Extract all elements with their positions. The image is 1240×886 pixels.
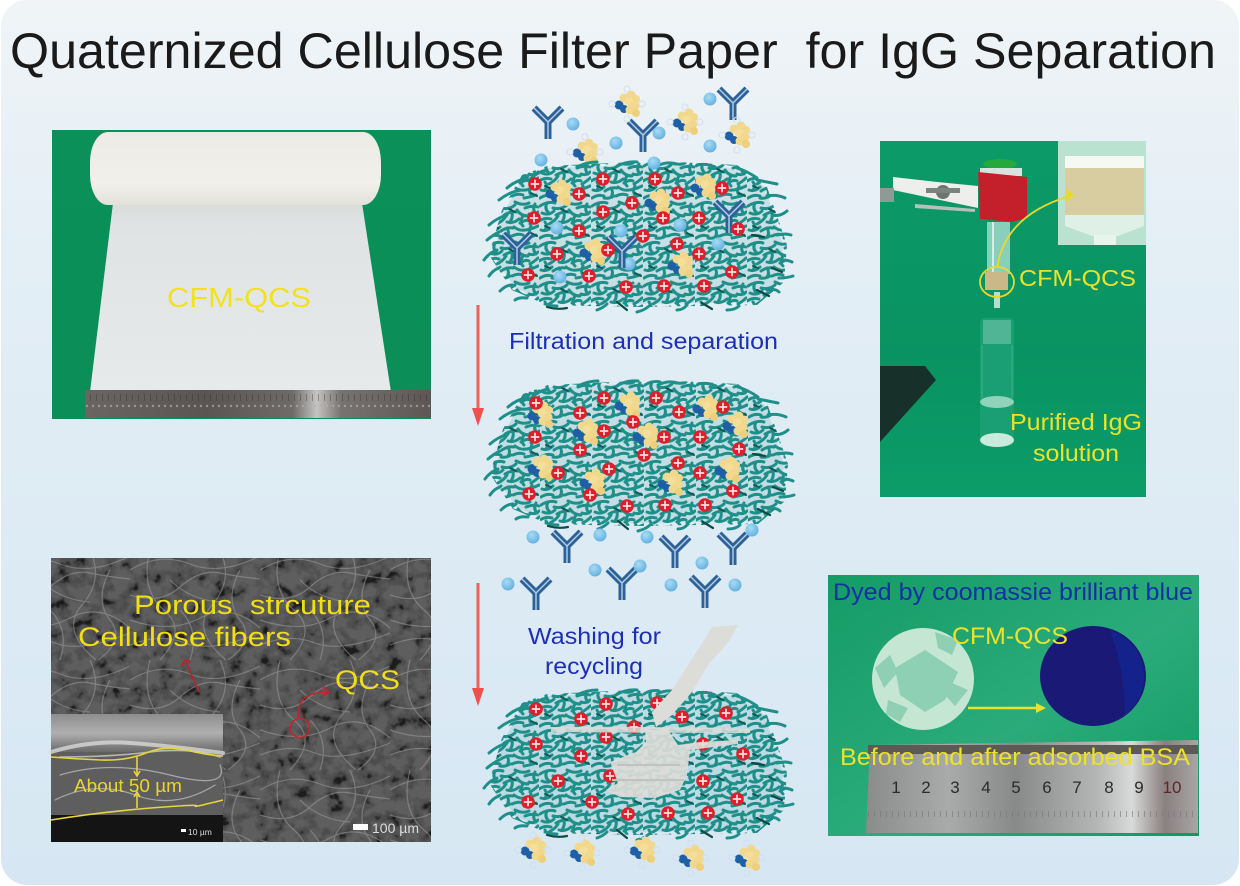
black object — [880, 366, 936, 442]
arrow: washing step — [472, 583, 484, 706]
dyed disc — [1040, 626, 1146, 726]
ruler: 10 — [1163, 778, 1181, 797]
label: cellulose fibers: Cellulose fibers — [78, 622, 291, 652]
membrane: bottom, regenerated by washing — [484, 625, 793, 840]
label: washing for recycling: Washing for — [528, 623, 661, 649]
diagram: eluted impurities — [515, 832, 765, 876]
paper sheet — [90, 203, 391, 392]
ruler: 7 — [1072, 778, 1082, 797]
inset: cross section — [51, 714, 223, 842]
ruler: 1 — [891, 778, 901, 797]
panel: filter paper roll photo — [52, 130, 431, 419]
label: washing for recycling — [528, 623, 661, 679]
label: purified IgG solution: solution — [1033, 440, 1119, 466]
label: CFM-QCS: CFM-QCS — [952, 623, 1068, 650]
fibers — [51, 558, 431, 842]
green top and red cap — [978, 159, 1027, 222]
ruler: 3 — [950, 778, 960, 797]
collecting vial — [980, 318, 1014, 447]
column tube — [985, 222, 1010, 308]
diagram: feed mixture above the membrane — [534, 86, 755, 170]
undyed disc — [872, 628, 974, 730]
ruler: 8 — [1104, 778, 1114, 797]
arrow: filtration step — [472, 305, 484, 426]
ruler: 2 — [921, 778, 931, 797]
ruler: 4 — [981, 778, 991, 797]
ruler: 9 — [1134, 778, 1144, 797]
thickness boundary lines — [51, 748, 223, 820]
inset scale bar: 10 µm — [188, 827, 212, 837]
membrane: middle, impurities retained — [485, 380, 794, 531]
panel: SEM micrograph — [51, 558, 431, 842]
label: QCS: QCS — [335, 665, 400, 695]
panel: filtration setup photo — [880, 141, 1146, 497]
clamp — [880, 177, 978, 212]
ruler: 5 — [1011, 778, 1021, 797]
inset: filter close-up — [1058, 141, 1146, 245]
red marker: QCS — [290, 687, 329, 738]
label: CFM-QCS: CFM-QCS — [1019, 265, 1136, 291]
label: porous structure: Porous strcuture — [134, 590, 371, 620]
label: about 50 µm: About 50 µm — [74, 776, 182, 796]
arrow: before to after — [968, 703, 1046, 713]
label: washing for recycling: recycling — [545, 653, 643, 679]
label: filtration and separation: Filtration and separation — [509, 328, 778, 354]
membrane: top, loaded with IgG and impurities — [484, 156, 793, 312]
label: purified IgG solution: Purified IgG — [1010, 409, 1142, 435]
label: before and after adsorbed BSA: Before and after adsorbed BSA — [840, 744, 1190, 771]
red arrow: fibers — [181, 660, 199, 692]
yellow ellipse and arrow — [980, 190, 1073, 297]
label: purified IgG solution — [1010, 409, 1142, 466]
ruler — [85, 390, 431, 418]
title: Quaternized Cellulose Filter Paper for IgG Separation — [10, 23, 1216, 79]
ruler: 6 — [1042, 778, 1052, 797]
water stream — [551, 625, 750, 798]
panel: dyed membrane photo — [828, 575, 1199, 836]
scale bar: 100 µm: 100 µm — [372, 820, 419, 836]
label: dyed by coomassie brilliant blue: Dyed by coomassie brilliant blue — [833, 579, 1193, 606]
label: CFM-QCS: CFM-QCS — [167, 282, 311, 313]
diagram: purified IgG below the membrane — [502, 524, 758, 610]
ruler — [866, 740, 1198, 833]
paper roll — [90, 132, 381, 205]
